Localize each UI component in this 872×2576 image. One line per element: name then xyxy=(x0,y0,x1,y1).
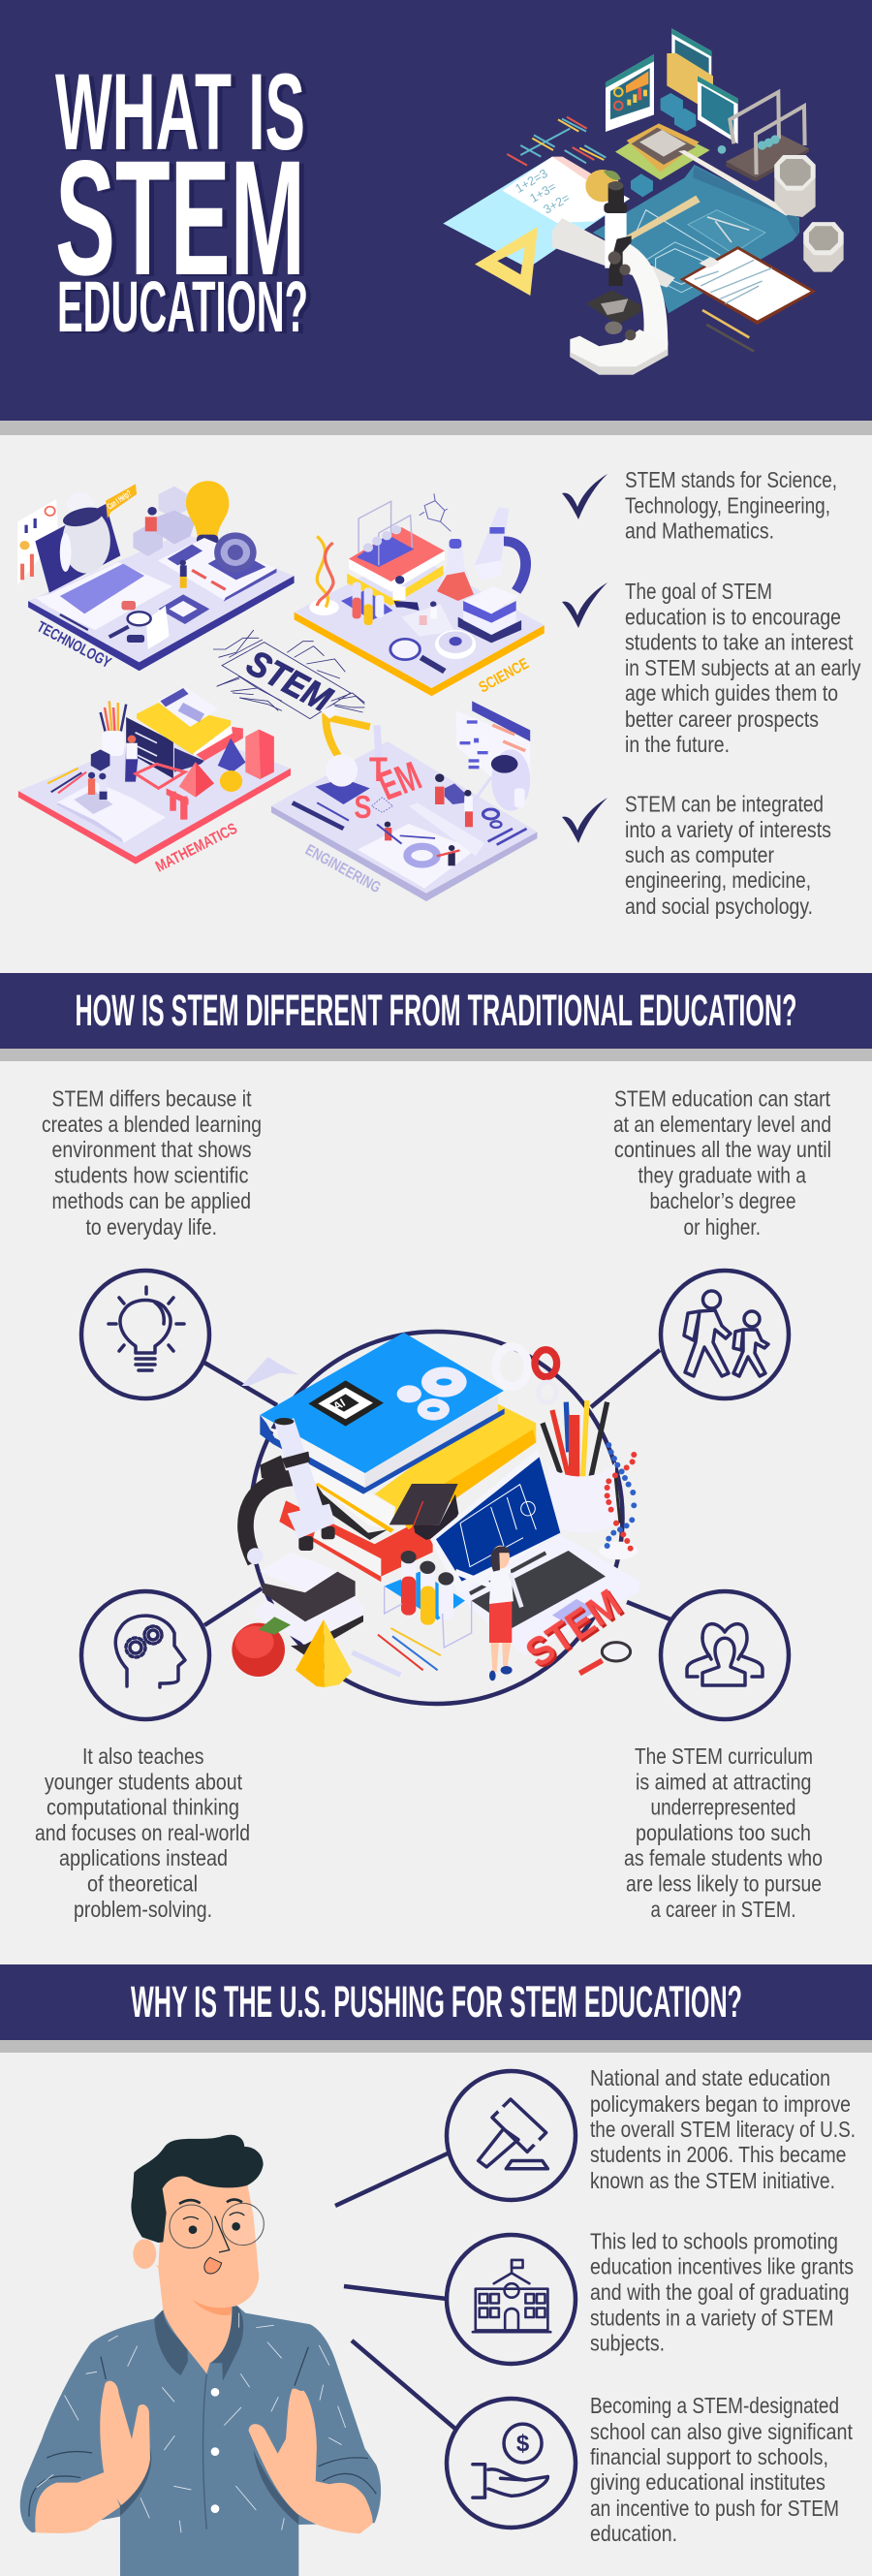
graduation cap xyxy=(389,1484,458,1540)
text: curriculum: a career in STEM. xyxy=(651,1897,796,1922)
text: blended learning: environment that shows xyxy=(52,1137,252,1162)
text: policymakers xyxy=(590,2065,856,2193)
paper plane xyxy=(241,1357,298,1386)
engineering platform: T xyxy=(369,750,388,789)
math paper: 3+2= xyxy=(541,191,572,217)
gears xyxy=(496,1346,557,1402)
label: Can I Help: Can I Help? xyxy=(106,488,133,512)
text: blended learning: to everyday life. xyxy=(85,1214,217,1240)
illustration: isometric STEM desk xyxy=(443,28,844,375)
label: technology: TECHNOLOGY xyxy=(34,619,113,672)
text: STEM definition xyxy=(625,467,837,543)
circuit traces xyxy=(218,678,364,712)
text: financial support: financial support to schools, xyxy=(590,2444,828,2469)
text: STEM definition: and Mathematics. xyxy=(625,518,774,543)
icon: school building xyxy=(447,2235,576,2364)
icon: group of people xyxy=(661,1591,789,1719)
technology platform xyxy=(17,481,295,671)
engineering platform xyxy=(271,701,537,901)
illustration: STEM education books and laptop xyxy=(232,1333,639,1687)
text: elementary to bachelor xyxy=(613,1085,831,1240)
head xyxy=(131,2135,264,2315)
text: integration: such as computer xyxy=(625,842,774,867)
abacus sticks xyxy=(507,117,606,166)
teacher figure xyxy=(455,1546,521,1681)
illustration: man gesturing xyxy=(20,2135,381,2576)
folder and code windows xyxy=(667,28,738,143)
text: curriculum: populations too such xyxy=(636,1820,811,1845)
text: curriculum: as female students who xyxy=(624,1845,823,1870)
text: curriculum: underrepresented xyxy=(651,1795,796,1820)
text: computational thinking: applications instead xyxy=(59,1845,228,1870)
icon: light bulb xyxy=(81,1271,209,1398)
text: computational thinking xyxy=(35,1744,250,1922)
text: curriculum xyxy=(624,1744,823,1922)
text: computational thinking: and focuses on real-world xyxy=(35,1820,250,1845)
book stack xyxy=(260,1333,536,1582)
text: elementary to bachelor: bachelor’s degree xyxy=(649,1188,796,1213)
pencils xyxy=(702,310,754,352)
3D STEM lettering: STEM xyxy=(517,1580,630,1676)
forearms xyxy=(35,2471,373,2533)
math paper xyxy=(443,157,630,268)
text: elementary to bachelor: at an elementary level and xyxy=(613,1112,831,1137)
connector lines and center circle xyxy=(204,1332,670,1704)
text: blended learning: students how scientific xyxy=(54,1163,248,1188)
test tube rack xyxy=(385,1551,472,1648)
text: elementary to bachelor: they graduate with a xyxy=(638,1163,806,1188)
text: curriculum: is aimed at attracting xyxy=(636,1770,812,1795)
label: STEM chip: STEM xyxy=(240,643,339,720)
text: elementary to bachelor: continues all the way until xyxy=(614,1137,831,1162)
text: curriculum: The STEM curriculum xyxy=(635,1744,813,1769)
central STEM chip xyxy=(213,630,364,719)
text: incentives xyxy=(590,2229,854,2355)
text: computational thinking: younger students about xyxy=(45,1770,243,1795)
science platform xyxy=(295,493,545,696)
text: computational thinking: of theoretical xyxy=(87,1870,198,1896)
buttons and placket xyxy=(203,2374,219,2529)
text: goal of STEM: better career prospects xyxy=(625,707,819,732)
text: elementary to bachelor: or higher. xyxy=(684,1214,761,1240)
sleeve folds xyxy=(29,2347,376,2517)
title: STEM xyxy=(55,126,305,309)
text: goal of STEM xyxy=(625,579,861,757)
header banner xyxy=(0,0,872,435)
text: goal of STEM: in the future. xyxy=(625,732,730,757)
section banner: why the U.S. xyxy=(0,1964,872,2053)
text: computational thinking: problem-solving. xyxy=(74,1897,212,1922)
label: science: SCIENCE xyxy=(477,655,532,696)
octagonal cylinders xyxy=(774,155,844,272)
cone xyxy=(296,1619,352,1687)
text: integration: into a variety of interests xyxy=(625,817,831,842)
text: financial support xyxy=(590,2393,854,2546)
title xyxy=(55,51,308,347)
shirt xyxy=(20,2306,381,2576)
math paper: 1+3= xyxy=(527,179,558,205)
panel: STEM fields illustration top xyxy=(17,481,545,719)
text: blended learning: STEM differs because it xyxy=(52,1085,252,1111)
text: integration: engineering, medicine, xyxy=(625,867,811,893)
icon: gavel xyxy=(447,2071,576,2200)
set square xyxy=(475,227,538,296)
title: WHAT IS xyxy=(55,51,305,173)
pencil cup xyxy=(543,1400,615,1533)
title: EDUCATION? xyxy=(57,267,308,347)
magnifier xyxy=(579,1643,631,1674)
text: integration xyxy=(625,791,831,919)
icon: head with gears xyxy=(81,1591,209,1719)
text: goal of STEM: The goal of STEM xyxy=(625,579,772,604)
icon: walking students xyxy=(661,1271,789,1398)
text: STEM definition: Technology, Engineering, xyxy=(625,492,830,518)
text: blended learning: methods can be applied xyxy=(52,1188,251,1213)
text: integration: STEM can be integrated xyxy=(625,791,824,816)
microscope xyxy=(552,181,675,375)
engineering platform: S xyxy=(354,789,372,826)
blueprint sheet xyxy=(593,150,799,313)
text: financial support: giving educational institutes xyxy=(590,2469,825,2495)
engineering platform: EM xyxy=(372,754,428,809)
text: computational thinking: It also teaches xyxy=(82,1744,203,1769)
text: incentives: subjects. xyxy=(590,2330,665,2355)
mathematics platform xyxy=(18,686,291,864)
panel: STEM fields illustration bottom xyxy=(18,678,537,901)
text: financial support: education. xyxy=(590,2521,677,2546)
text: computational thinking: computational thinking xyxy=(47,1795,239,1820)
microchip xyxy=(615,123,710,180)
AI chip label: AI xyxy=(330,1396,348,1414)
text: goal of STEM: age which guides them to xyxy=(625,680,838,706)
math paper: 1+2=3 xyxy=(513,167,550,196)
shirt shadows xyxy=(120,2306,298,2525)
section banner: traditional education xyxy=(0,973,872,1061)
text: integration: and social psychology. xyxy=(625,894,813,919)
hands xyxy=(100,2381,317,2515)
neck xyxy=(155,2265,232,2373)
clipboard xyxy=(680,246,816,325)
icon: hand with coin: $ xyxy=(516,2431,530,2457)
newton's cradle xyxy=(718,92,809,181)
label: engineering: ENGINEERING xyxy=(302,842,384,896)
laptop xyxy=(430,1449,639,1655)
microscope xyxy=(245,1418,363,1655)
text: elementary to bachelor: STEM education can start xyxy=(614,1085,831,1111)
text: incentives: This led to schools promoting xyxy=(590,2229,838,2254)
apple xyxy=(585,170,621,202)
icon: hand with coin xyxy=(447,2399,576,2528)
apple xyxy=(232,1617,291,1677)
connector lines to icons xyxy=(335,2153,456,2430)
analytics window xyxy=(606,54,654,132)
shirt highlights xyxy=(37,2313,346,2532)
data cubes xyxy=(631,93,696,197)
wrench and small pencils xyxy=(352,1628,441,1675)
text: curriculum: are less likely to pursue xyxy=(626,1870,822,1896)
text: blended learning: creates a blended learning xyxy=(42,1112,262,1137)
dna model xyxy=(599,1442,638,1559)
checkmark icons xyxy=(562,474,607,843)
text: blended learning xyxy=(42,1085,262,1240)
label: mathematics: MATHEMATICS xyxy=(153,821,240,876)
text: policymakers: National and state education xyxy=(590,2065,830,2090)
